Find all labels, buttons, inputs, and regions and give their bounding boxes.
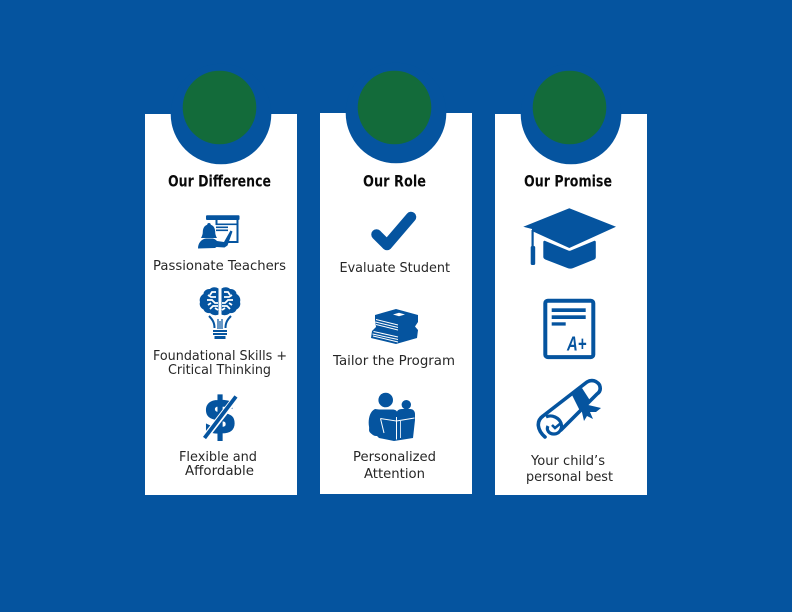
green badge: [358, 71, 431, 144]
label: Critical Thinking: [168, 362, 271, 378]
label: Evaluate Student: [340, 260, 450, 276]
label: Attention: [364, 466, 425, 482]
panel: Our Difference: [145, 64, 297, 495]
icon: diploma scroll: [538, 381, 601, 437]
label: Passionate Teachers: [153, 258, 286, 274]
icon: A+ report card: A+: [566, 334, 587, 356]
label: [179, 449, 257, 479]
icon: stack of books: [371, 309, 418, 344]
label: personal best: [526, 469, 613, 485]
heading: Our Role: [363, 172, 426, 190]
label: [353, 449, 436, 482]
label: Flexible and: [179, 449, 257, 465]
icon: teacher at board: [198, 215, 240, 248]
heading: Our Promise: [524, 172, 612, 190]
label: Tailor the Program: [332, 353, 455, 369]
label: Foundational Skills +: [153, 348, 287, 364]
label: Your child’s: [530, 453, 605, 469]
label: Personalized: [353, 449, 436, 465]
label: [153, 348, 287, 378]
green badge: [183, 71, 256, 144]
green badge: [533, 71, 606, 144]
icon: check mark: [376, 217, 411, 245]
icon: crossed-out dollar: $: [203, 387, 237, 445]
panel: Our Promise: [495, 64, 647, 495]
icon: parent reading with child: [369, 393, 415, 441]
label: [526, 453, 613, 485]
icon: A+ report card: [545, 301, 593, 357]
panel: Our Role: [320, 63, 472, 494]
heading: Our Difference: [168, 172, 271, 190]
label: Affordable: [185, 463, 254, 479]
icon: graduation cap: [523, 208, 616, 269]
icon: brain light bulb: [200, 287, 240, 339]
